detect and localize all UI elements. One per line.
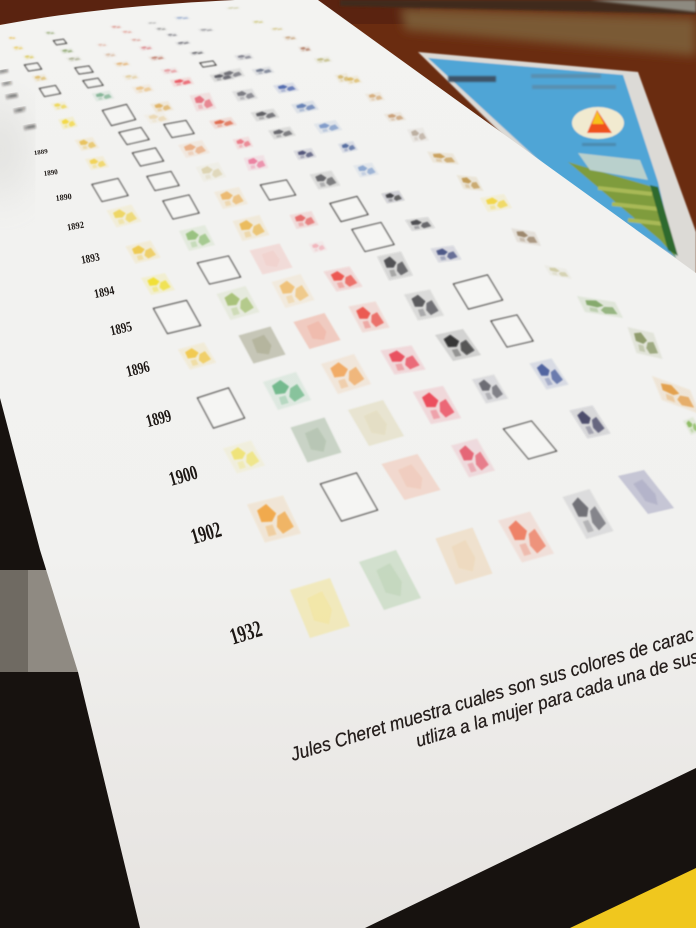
row 1892-1893 thumbnails: [106, 190, 405, 264]
row 1899: [198, 315, 533, 428]
year labels: 1888: [23, 124, 36, 132]
year labels: 1890: [55, 192, 72, 203]
poster behind the page: [418, 52, 696, 290]
year labels: 1902: [188, 518, 224, 550]
row 1896: [178, 275, 502, 370]
year labels: 1889: [33, 148, 49, 157]
column 6: blues: [174, 16, 379, 178]
year labels: 1887: [13, 107, 26, 115]
row 1902: [247, 406, 610, 542]
far column: figures: [226, 6, 696, 435]
column 1: yellows: [8, 36, 109, 170]
year labels: 1900: [166, 460, 200, 490]
year labels: 1894: [93, 284, 116, 301]
row 1894: [141, 217, 435, 295]
year labels: 1893: [80, 252, 101, 267]
column 4: reds and pinks: [110, 25, 296, 200]
year labels: 1892: [66, 219, 85, 233]
row 1895: [154, 246, 462, 334]
year labels: 1896: [124, 358, 152, 381]
year labels: 1895: [108, 319, 134, 339]
year labels: 1886: [5, 93, 18, 101]
year labels: 1899: [144, 406, 174, 432]
poster emblem: [572, 107, 624, 139]
row 1900: [223, 358, 568, 474]
row 1932: [290, 470, 674, 638]
year labels: 1932: [227, 616, 265, 650]
yellow strip: [570, 868, 696, 928]
year labels: 1890: [43, 167, 59, 178]
year labels: [0, 69, 265, 650]
year labels: 1885: [2, 81, 13, 88]
column 5: greys: [146, 22, 340, 190]
poster field: [568, 162, 676, 258]
poster thumbnails: [8, 6, 696, 638]
column 2: boxes and greens: [44, 31, 199, 219]
poster heading marks: [448, 74, 616, 146]
column 3: tans and oranges: [96, 43, 248, 209]
